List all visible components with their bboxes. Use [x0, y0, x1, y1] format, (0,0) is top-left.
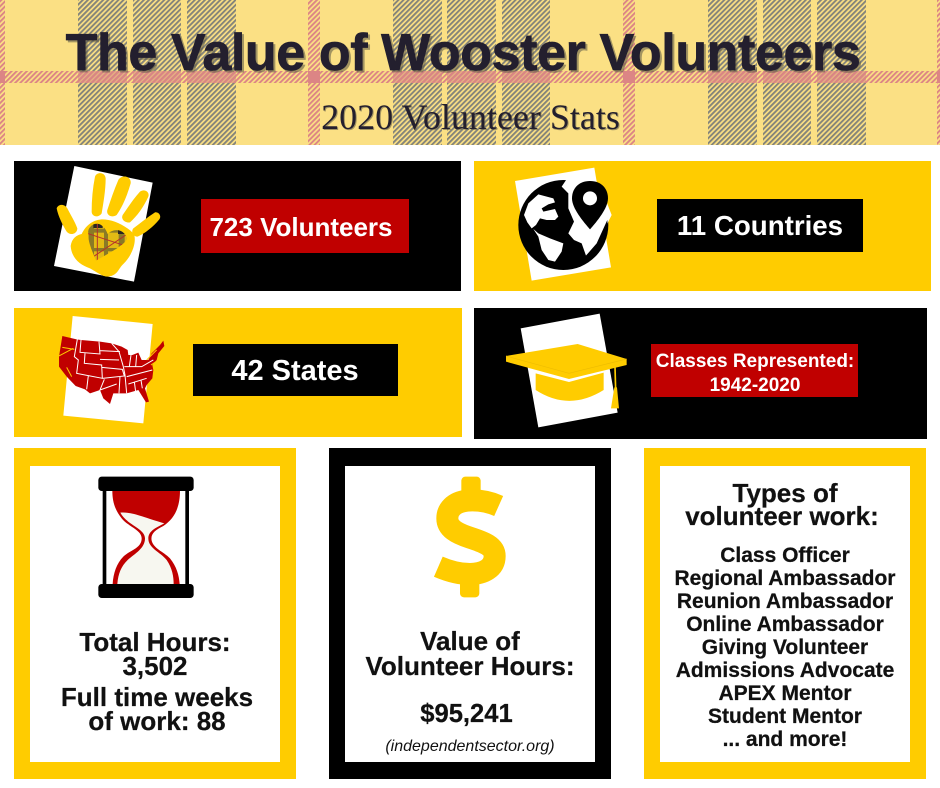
subtitle: 2020 Volunteer Stats: [321, 97, 620, 137]
text: value of volunteer hours: [366, 626, 574, 755]
text: total hours: Total Hours:: [79, 627, 231, 657]
label: 723 Volunteers: 723 Volunteers: [209, 212, 393, 242]
text: total hours: of work: 88: [88, 706, 226, 736]
panel: classes represented: [474, 308, 927, 439]
text: total hours: [61, 627, 253, 736]
text: total hours: 3,502: [122, 651, 188, 681]
label: 42 States: 42 States: [231, 355, 359, 387]
label: 11 Countries: 11 Countries: [677, 210, 843, 241]
icon: dollar sign: [438, 477, 499, 597]
label: classes represented: Classes Represented:: [656, 351, 854, 372]
panel: states: [14, 308, 462, 437]
panel: value of volunteer hours: [329, 448, 611, 779]
panel: volunteers: [14, 161, 461, 291]
panel: countries: [474, 161, 931, 291]
icon: hand with plaid heart: [54, 166, 160, 282]
icon: hourglass: [98, 477, 194, 598]
text: total hours: Full time weeks: [61, 682, 253, 712]
list: volunteer roles: Regional Ambassador: [675, 567, 895, 590]
list: volunteer roles: Reunion Ambassador: [677, 590, 893, 613]
list: volunteer roles: Online Ambassador: [686, 613, 884, 636]
list: volunteer roles: APEX Mentor: [718, 682, 852, 705]
text: value of volunteer hours: $95,241: [420, 700, 513, 728]
label: 723 Volunteers: [201, 199, 409, 253]
label: classes represented: [651, 344, 858, 397]
title: The Value of Wooster Volunteers: [66, 24, 860, 82]
panel: types of volunteer work: [644, 448, 926, 779]
text: value of volunteer hours: (independentsector.org): [385, 738, 555, 755]
list: volunteer roles: Student Mentor: [708, 705, 862, 728]
icon: graduation cap: [506, 314, 627, 427]
label: classes represented: 1942-2020: [710, 375, 800, 396]
panel: total hours: [14, 448, 296, 779]
list: volunteer roles: ... and more!: [723, 728, 847, 751]
label: 42 States: [193, 344, 398, 396]
icon: globe with map pin: [515, 168, 612, 281]
list: volunteer roles: Class Officer: [720, 544, 850, 567]
heading: types of volunteer work: [685, 478, 879, 531]
list: volunteer roles: Admissions Advocate: [676, 659, 894, 682]
text: value of volunteer hours: Volunteer Hours:: [366, 651, 574, 681]
list: volunteer roles: Giving Volunteer: [702, 636, 868, 659]
text: value of volunteer hours: Value of: [420, 626, 520, 656]
icon: map of United States: [59, 316, 164, 423]
header plaid banner: [0, 0, 940, 145]
label: 11 Countries: [657, 199, 863, 252]
list: volunteer roles: [675, 544, 895, 751]
heading: types of volunteer work: Types of: [733, 478, 838, 508]
heading: types of volunteer work: volunteer work:: [685, 501, 879, 531]
